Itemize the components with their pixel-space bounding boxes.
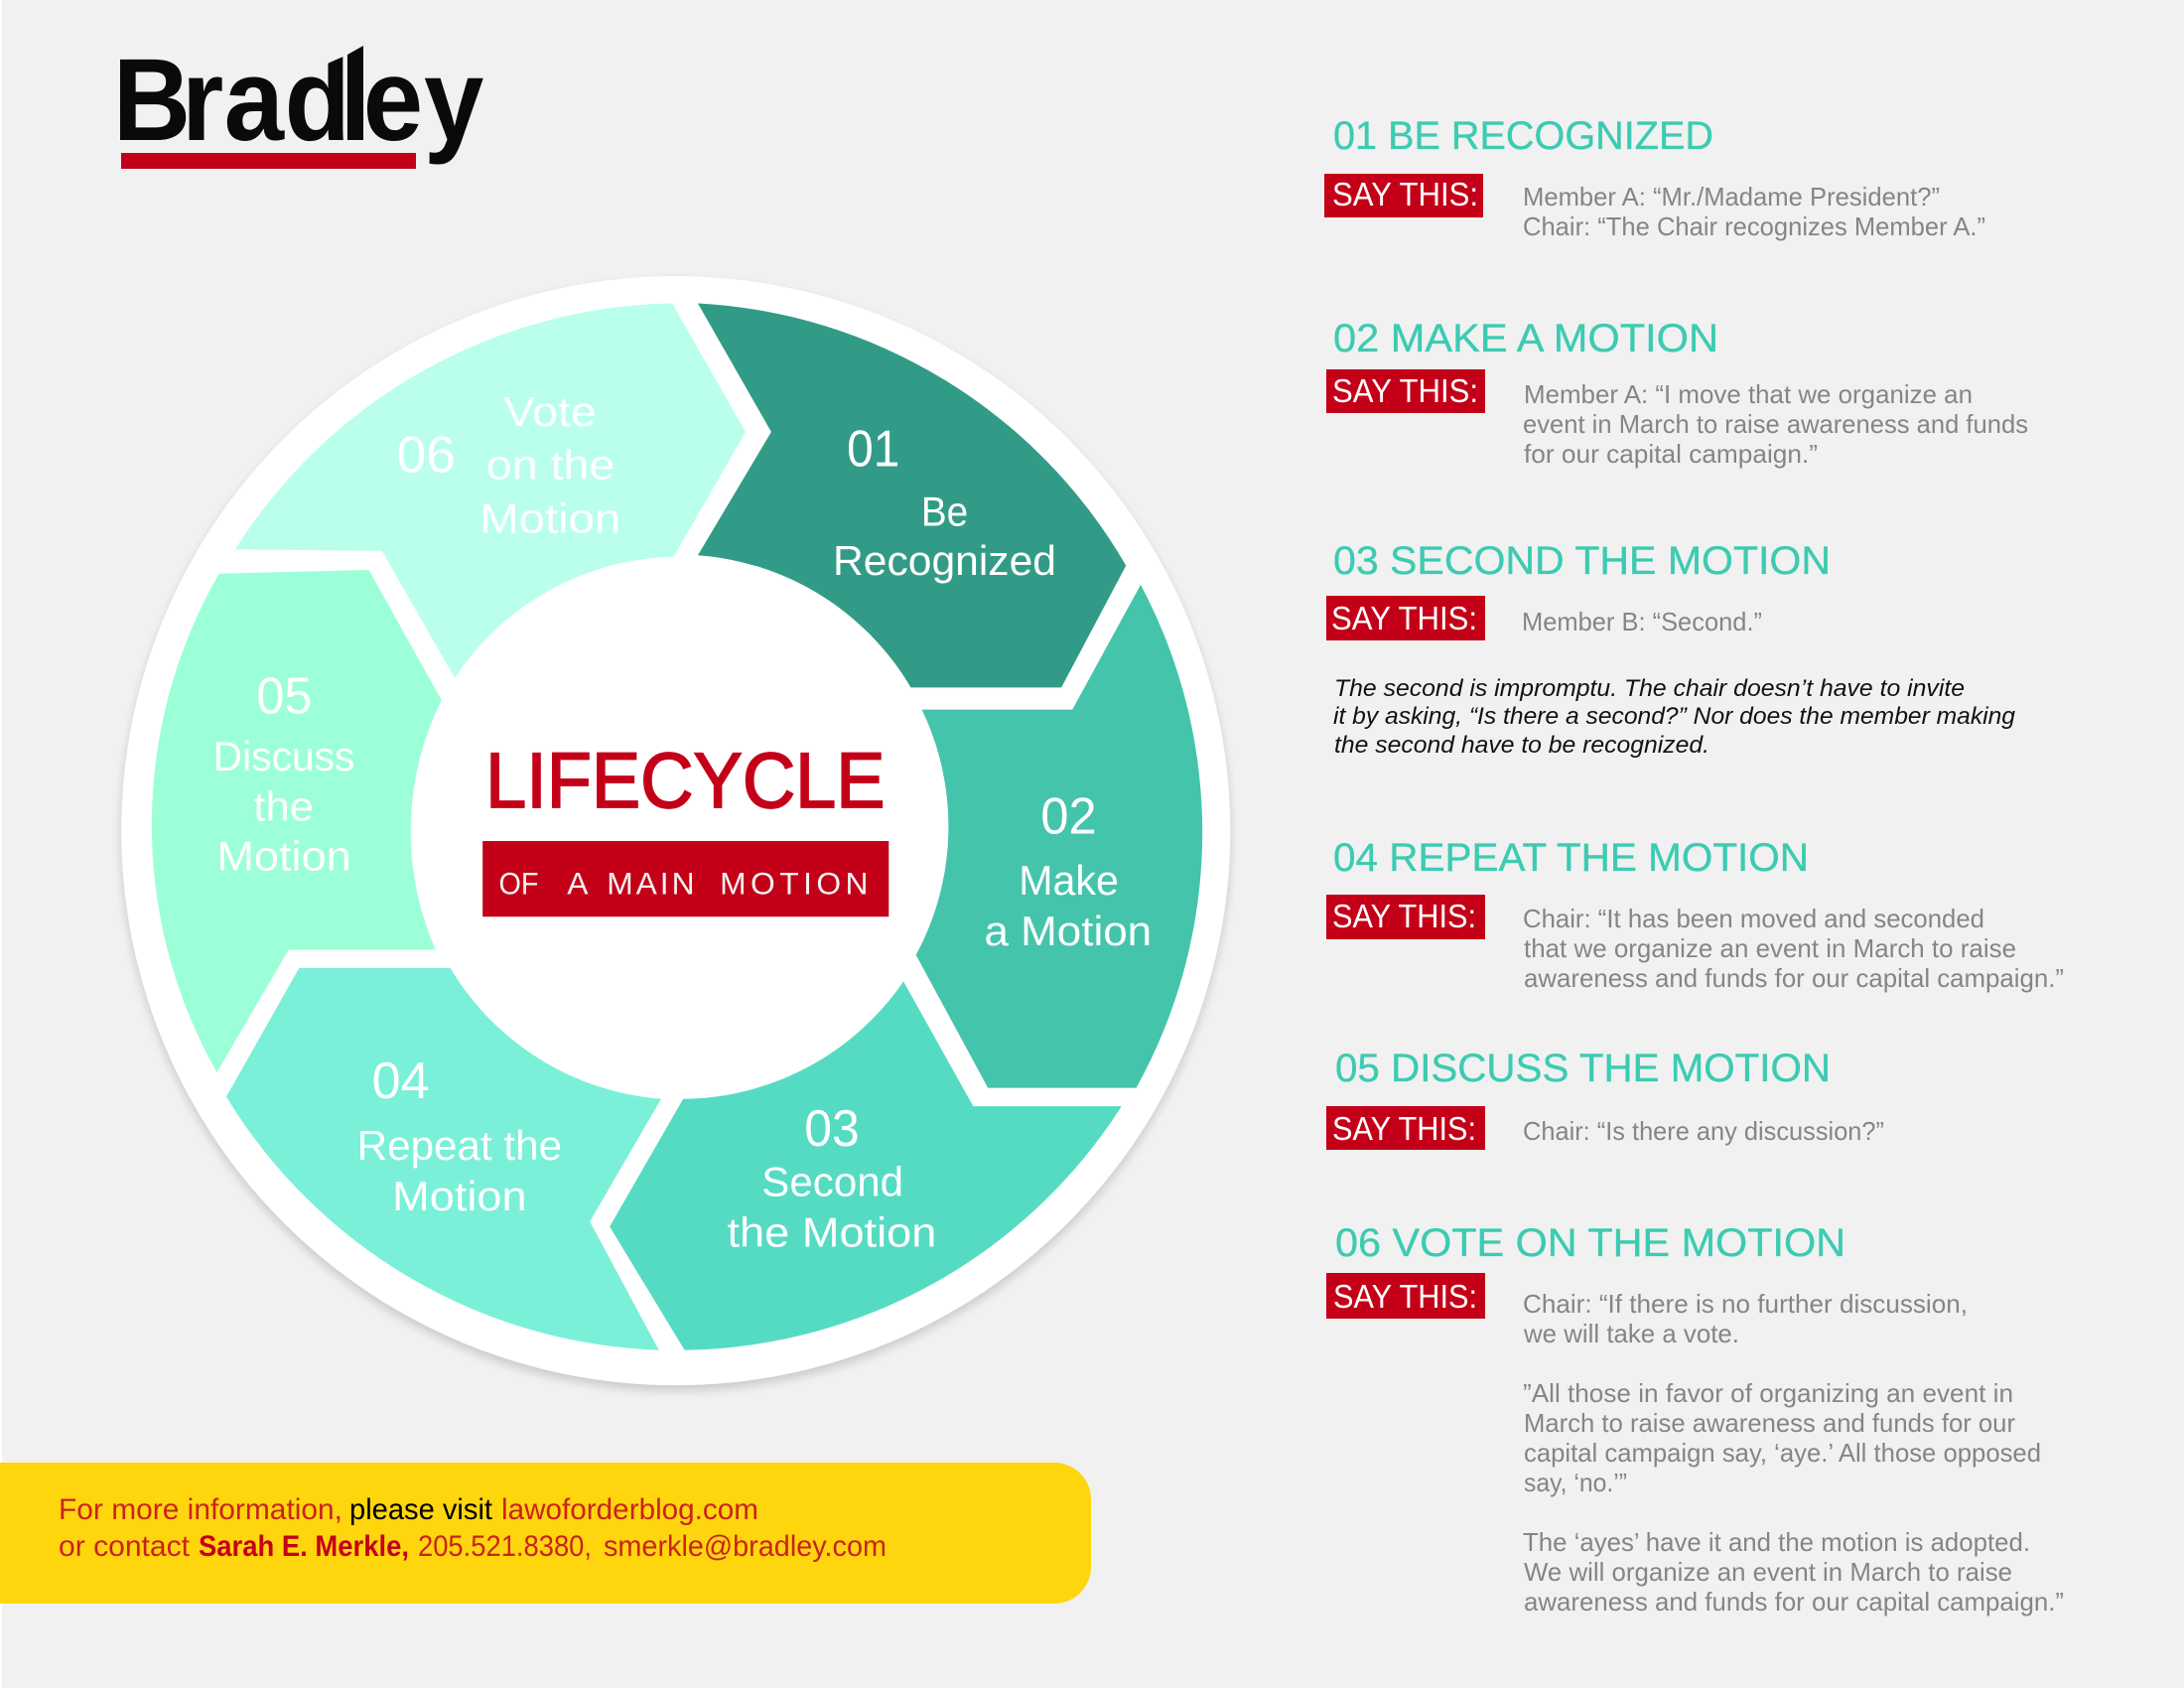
step 03 text block: SAY THIS: — [1331, 600, 1477, 636]
step 05 text block — [1326, 1047, 1884, 1150]
step 06 text block: The ‘ayes’ have it and the motion is adopted. — [1523, 1527, 2030, 1557]
segment 06: Vote on the Motion: Vote — [504, 389, 597, 435]
step 02 text block: Member A: “I move that we organize an — [1524, 379, 1973, 409]
segment 03: Second the Motion — [610, 981, 1122, 1350]
footer contact banner: lawoforderblog.com — [501, 1493, 758, 1526]
segment 02: Make a Motion — [916, 585, 1202, 1088]
step 02 text block: 02 MAKE A MOTION — [1333, 317, 1718, 360]
step 06 text block: 06 VOTE ON THE MOTION — [1335, 1221, 1845, 1265]
segment 05: Discuss the Motion: Discuss — [213, 734, 354, 779]
segment 02: Make a Motion: a Motion — [984, 909, 1152, 954]
step 01 text block: SAY THIS: — [1332, 176, 1478, 212]
step 06 text block: We will organize an event in March to raise — [1524, 1557, 2012, 1587]
wheel centre title — [482, 737, 888, 916]
segment 06: Vote on the Motion — [235, 303, 746, 678]
lifecycle wheel — [121, 276, 1230, 1390]
step 06 text block: March to raise awareness and funds for our — [1524, 1408, 2015, 1438]
step 06 text block: ”All those in favor of organizing an event in — [1523, 1378, 2013, 1408]
segment 05: Discuss the Motion — [152, 570, 442, 1072]
segment 01: Be Recognized: 01 — [847, 420, 899, 478]
step 06 text block: capital campaign say, ‘aye.’ All those opposed — [1524, 1438, 2041, 1468]
footer contact banner — [0, 1463, 1091, 1604]
step 05 text block: Chair: “Is there any discussion?” — [1523, 1116, 1884, 1146]
segment 02: Make a Motion: 02 — [1040, 787, 1097, 845]
footer contact banner: smerkle@bradley.com — [604, 1530, 887, 1563]
logo: Bradley: Bradley — [113, 35, 483, 166]
segment 06: Vote on the Motion: on the — [486, 442, 614, 488]
step 03 text block: Member B: “Second.” — [1522, 607, 1762, 636]
step 02 text block: SAY THIS: — [1332, 372, 1478, 409]
step 05 text block: SAY THIS: — [1332, 1110, 1476, 1147]
step 04 text block: 04 REPEAT THE MOTION — [1333, 836, 1809, 880]
step 04 text block: SAY THIS: — [1332, 898, 1476, 934]
wheel centre title: MAIN — [607, 865, 698, 901]
wheel centre title: OF — [498, 865, 538, 901]
step 02 text block: event in March to raise awareness and funds — [1523, 409, 2028, 439]
step 04 text block: Chair: “It has been moved and seconded — [1523, 904, 1984, 933]
step 06 text block: we will take a vote. — [1523, 1319, 1739, 1348]
segment 04: Repeat the Motion: Motion — [392, 1174, 527, 1219]
segment 06: Vote on the Motion: 06 — [397, 426, 456, 484]
step 01 text block: Member A: “Mr./Madame President?” — [1523, 182, 1940, 211]
step 06 text block: SAY THIS: — [1333, 1278, 1477, 1315]
segment 04: Repeat the Motion: Repeat the — [357, 1123, 562, 1169]
segment 01: Be Recognized: Be — [921, 490, 968, 535]
segment 01: Be Recognized — [698, 303, 1126, 687]
step 06 text block: awareness and funds for our capital campaign.” — [1524, 1587, 2064, 1617]
wheel centre title: A — [567, 865, 589, 901]
segment 06: Vote on the Motion: Motion — [479, 495, 620, 541]
footer contact banner: please visit — [349, 1493, 493, 1526]
footer contact banner: 205.521.8380, — [418, 1530, 592, 1563]
segment 05: Discuss the Motion: Motion — [216, 834, 351, 880]
segment 01: Be Recognized: Recognized — [833, 538, 1056, 584]
footer contact banner: or contact — [59, 1530, 191, 1563]
segment 04: Repeat the Motion — [226, 968, 661, 1350]
step 06 text block: Chair: “If there is no further discussion, — [1523, 1289, 1968, 1319]
step 01 text block — [1324, 114, 1985, 241]
step 02 text block — [1326, 317, 2028, 469]
step 01 text block: Chair: “The Chair recognizes Member A.” — [1523, 211, 1985, 241]
footer contact banner: For more information, — [59, 1493, 342, 1526]
segment 03: Second the Motion: 03 — [804, 1099, 860, 1157]
step 02 text block: for our capital campaign.” — [1524, 439, 1818, 469]
step 05 text block: 05 DISCUSS THE MOTION — [1335, 1047, 1831, 1090]
wheel centre title: MOTION — [720, 865, 873, 901]
step 03 text block: it by asking, “Is there a second?” Nor does the member making — [1333, 703, 2015, 730]
segment 05: Discuss the Motion: 05 — [256, 666, 313, 724]
step 01 text block: 01 BE RECOGNIZED — [1333, 114, 1713, 158]
step 03 text block — [1326, 539, 2015, 759]
step 04 text block: that we organize an event in March to raise — [1524, 933, 2016, 963]
step 03 text block: The second is impromptu. The chair doesn’t have to invite — [1334, 675, 1965, 702]
step 03 text block: the second have to be recognized. — [1334, 732, 1709, 759]
segment 03: Second the Motion: Second — [761, 1159, 903, 1204]
step 06 text block: say, ‘no.’” — [1524, 1468, 1627, 1497]
segment 05: Discuss the Motion: the — [253, 783, 314, 829]
step 06 text block — [1326, 1221, 2064, 1617]
step 04 text block — [1326, 836, 2064, 993]
segment 02: Make a Motion: Make — [1019, 858, 1119, 904]
footer contact banner: Sarah E. Merkle, — [199, 1530, 409, 1563]
wheel centre title: LIFECYCLE — [485, 737, 886, 824]
segment 04: Repeat the Motion: 04 — [371, 1052, 430, 1109]
step 03 text block: 03 SECOND THE MOTION — [1333, 539, 1831, 583]
step 04 text block: awareness and funds for our capital campaign.” — [1524, 963, 2064, 993]
segment 03: Second the Motion: the Motion — [728, 1209, 936, 1255]
